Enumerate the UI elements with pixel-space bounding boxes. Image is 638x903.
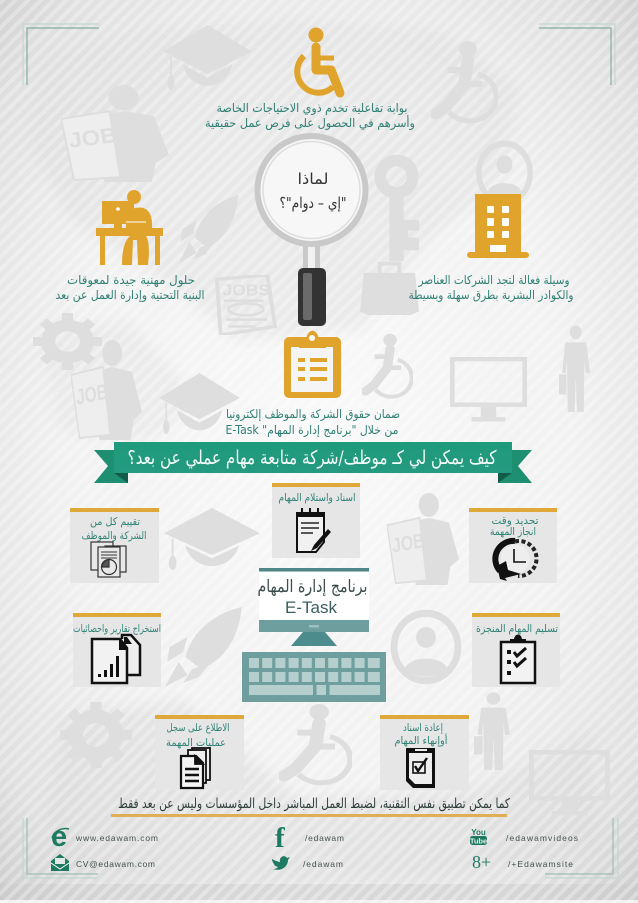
icon: building xyxy=(467,194,529,258)
card: assign and receive tasks xyxy=(272,483,360,558)
text: companies find talent: وسيلة فعالة لتجد الشركات العناصر xyxy=(418,273,570,288)
card: evaluate company and employee: الشركة والموظف xyxy=(82,530,146,542)
icon: clipboard xyxy=(284,331,341,398)
icon: document with bars xyxy=(92,635,140,683)
card: reassign or close tasks: إعادة اسناد xyxy=(403,722,443,734)
icon: google plus: 8+ xyxy=(472,852,491,872)
text: accessibility portal: وأسرهم في الحصول على فرص عمل حقيقية xyxy=(205,115,415,131)
icon: notepad and pen xyxy=(296,508,331,552)
icon: worker at desk xyxy=(96,190,163,265)
website: www.edawam.com xyxy=(75,833,158,843)
monitor stand xyxy=(291,632,337,646)
card: evaluate company and employee xyxy=(70,508,159,583)
twitter handle: /edawam xyxy=(303,859,343,869)
question in lens: "إي – دوام"؟ xyxy=(280,194,346,213)
icon: wheelchair xyxy=(297,28,340,93)
question in lens xyxy=(280,170,346,213)
google plus handle: /+Edawamsite xyxy=(508,859,573,869)
magnifying glass xyxy=(258,136,366,326)
card: submit completed tasks: تسليم المهام المنجزة xyxy=(476,623,558,635)
card: extract reports xyxy=(73,613,161,687)
text: rights guarantee: من خلال "برنامج إدارة المهام" E-Task xyxy=(226,423,398,438)
footer contact links xyxy=(51,821,578,872)
gold divider xyxy=(111,814,507,817)
icon: youtube: Tube xyxy=(470,836,487,846)
closing statement: كما يمكن تطبيق نفس التقنية، لضبط العمل المباشر داخل المؤسسات وليس عن بعد فقط xyxy=(118,796,510,812)
card: reassign or close tasks: أوإنهاء المهام xyxy=(394,733,448,747)
email: CV@edawam.com xyxy=(76,859,155,869)
facebook handle: /edawam xyxy=(305,833,344,843)
program title: برنامج إدارة المهام xyxy=(258,577,368,597)
card: view task log: الاطلاع على سجل xyxy=(166,722,230,734)
text: accessibility portal: بوابة تفاعلية تخدم ذوي الاحتياجات الخاصة xyxy=(216,101,408,116)
icon: checked document xyxy=(406,748,435,788)
text: remote work solutions: حلول مهنية جيدة لمعوقات xyxy=(67,273,195,288)
icon: report pages xyxy=(91,542,126,577)
card: submit completed tasks xyxy=(472,613,560,687)
card: view task log: عمليات المهمة xyxy=(166,737,226,749)
icon: clock with arrow xyxy=(495,541,537,581)
card: assign and receive tasks: اسناد واستلام المهام xyxy=(278,492,356,504)
card: evaluate company and employee: تقييم كل من xyxy=(90,516,140,528)
corner bracket: bottom left xyxy=(23,818,98,878)
corner bracket: top left xyxy=(23,24,99,85)
text: companies find talent: والكوادر البشرية بطرق سهلة وبسيطة xyxy=(408,288,574,303)
text: rights guarantee: ضمان حقوق الشركة والموظف إلكترونيا xyxy=(226,407,400,422)
text: rights guarantee xyxy=(226,407,400,438)
question in lens: لماذا xyxy=(298,170,328,188)
icon: facebook: f xyxy=(275,822,285,854)
text: remote work solutions: البنية التحتية وإدارة العمل عن بعد xyxy=(56,288,204,303)
icon: youtube xyxy=(470,828,487,846)
text: accessibility portal xyxy=(205,101,415,131)
corner bracket: bottom right xyxy=(545,818,618,878)
icon: envelope xyxy=(51,854,69,871)
icon: checklist xyxy=(501,634,535,683)
ghost background icons xyxy=(33,25,610,816)
card: extract reports: استخراج تقارير واحصائيات xyxy=(73,623,161,635)
icon: internet explorer: e xyxy=(51,821,67,853)
keyboard xyxy=(242,652,386,702)
card: reassign or close tasks xyxy=(380,715,469,790)
text: companies find talent xyxy=(408,273,574,303)
monitor bar xyxy=(259,620,369,632)
icon: stacked documents xyxy=(181,748,210,788)
icon: twitter xyxy=(272,856,290,870)
card: set completion time xyxy=(469,508,557,583)
card: view task log xyxy=(155,715,244,790)
banner heading: كيف يمكن لي كـ موظف/شركة متابعة مهام عملي عن بعد؟ xyxy=(128,447,497,469)
card: set completion time: انجاز المهمة xyxy=(490,526,536,538)
banner xyxy=(94,442,532,483)
corner bracket: top right xyxy=(539,24,615,85)
card: set completion time: تحديد وقت xyxy=(492,515,539,527)
computer: E-Task program xyxy=(242,568,386,702)
youtube handle: /edawamvideos xyxy=(506,833,578,843)
text: remote work solutions xyxy=(56,273,204,303)
icon: youtube: You xyxy=(471,828,486,837)
program name: E-Task xyxy=(285,598,337,617)
